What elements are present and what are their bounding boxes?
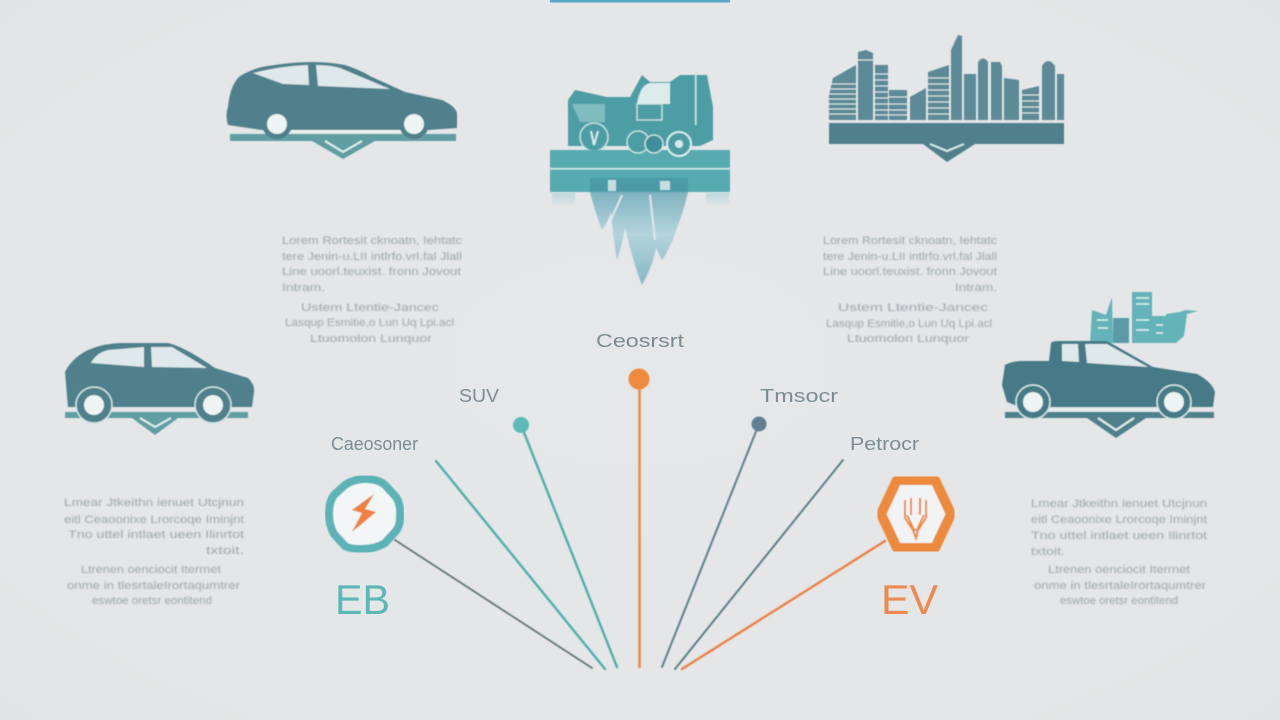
icon: right pickup with small city [1002,292,1215,438]
text block: left: Lmear Jtkeithn ienuet Utcjnun [64,497,244,509]
label: truck: Tmsocr [760,386,838,406]
text block: left [64,497,244,607]
icon: center truck on iceberg [550,75,730,285]
text block: right: onme in tlesrtaleIrortaqumtrer [1034,580,1206,592]
text block: top right: tere Jenin-u.LII intlrfo.vrl.fal Jlall [823,251,997,263]
text block: top left: Line uoorl.teuxist. fronn Jovout [282,266,461,278]
label: EV: EV [881,576,938,623]
text block: right: txtoit. [1031,546,1065,558]
text block: left: txtoit. [206,545,244,557]
text block: top right [823,235,998,345]
text block: top left: Ustem Ltentie-Jancec [301,302,440,314]
text block: left: Ltrenen oenciocit Iterrnet [81,564,221,576]
text block: top right: Ustem Ltentie-Jancec [838,302,989,314]
icon: left hexagon with bolt [329,479,400,549]
text block: top right: Lasqup Esmitie,o Lun Uq Lpi.acl [826,318,992,330]
text block: right: eswtoe oretsr eontitend [1060,595,1178,607]
label: right: Petrocr [850,434,919,454]
text block: top right: Intram. [955,282,997,294]
icon: right hexagon with plug [881,480,951,548]
text block: top left: Ltuomolon Lunquor [310,333,432,345]
text block: left: eitl Ceaoonixe Lrorcoqe Iminjnt [64,514,244,526]
text block: top right: Ltuomolon Lunquor [847,333,969,345]
label: SUV: SUV [459,386,499,406]
text block: right: Ltrenen oenciocit Iterrnet [1048,564,1190,576]
text block: right [1031,498,1207,607]
text block: top left: Lasqup Esmitie,o Lun Uq Lpi.acl [285,317,454,329]
text block: top left: Intram. [282,282,325,294]
text block: left: eswtoe oretsr eontitend [92,595,212,607]
text block: top left: Lorem Rortesit cknoatn, Iehtatc [282,235,463,247]
icon: top right city skyline [829,35,1064,162]
text block: right: Lmear Jtkeithn ienuet Utcjnun [1031,498,1207,510]
text block: top right: Lorem Rortesit cknoatn, Iehtatc [823,235,998,247]
icon: left car [65,343,254,435]
text block: right: eitl Ceaoonixe Lrorcoqe Iminjnt [1031,514,1207,526]
label: center: Ceosrsrt [596,331,684,351]
label: EB: EB [335,576,390,623]
text block: left: Tno uttel intlaet ueen Ilinrtot [68,529,244,541]
text block: left: onme in tlesrtaleIrortaqumtrer [67,580,240,592]
header bar remnant [550,0,730,2]
text block: top left [282,235,463,345]
text block: top right: Line uoorl.teuxist. fronn Jovout [823,266,997,278]
fan lines and dots [395,368,885,669]
label: left: Caeosoner [331,434,418,454]
text block: top left: tere Jenin-u.LII intlrfo.vrl.fal Jlall [282,251,462,263]
icon: top left car [226,62,457,159]
text block: right: Tno uttel intlaet ueen Ilinrtot [1031,530,1207,542]
